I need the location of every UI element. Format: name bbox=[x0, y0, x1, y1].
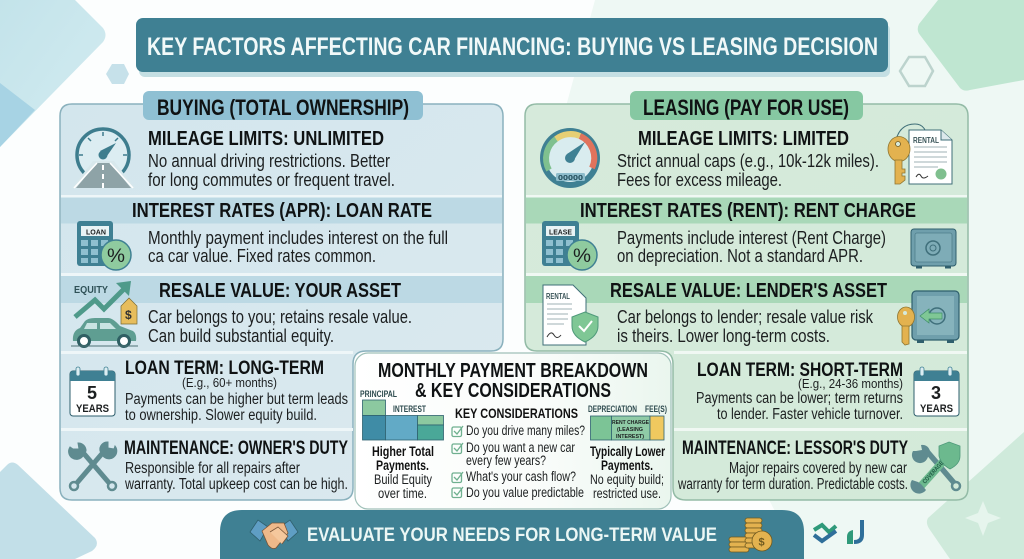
icon: rental document with shield: RENTAL bbox=[546, 292, 570, 301]
icon: calendar 5 years: YEARS bbox=[76, 403, 109, 415]
chart: leasing payment bar: DEPRECIATION bbox=[588, 404, 637, 414]
checklist: key considerations: Do you want a new car bbox=[466, 440, 575, 455]
icon: crossed wrenches bbox=[69, 442, 117, 490]
text: resale value lender's asset: is theirs. Lower long-term costs. bbox=[617, 326, 830, 346]
text: maintenance owner's duty bbox=[124, 438, 348, 493]
icon: loan calculator: % bbox=[107, 246, 125, 267]
heading: monthly payment bbox=[378, 360, 648, 402]
icon: key and rental document bbox=[888, 124, 952, 184]
icon: key and rental document: RENTAL bbox=[913, 136, 939, 145]
text: loan term long-term bbox=[125, 358, 348, 424]
icon: equity car: EQUITY bbox=[74, 285, 108, 296]
text: maintenance owner's duty: MAINTENANCE: OWNER'S DUTY bbox=[124, 438, 348, 459]
chart: leasing payment bar: (LEASING bbox=[617, 427, 643, 433]
text: resale value your asset: RESALE VALUE: YOUR ASSET bbox=[159, 279, 401, 302]
icon: limited mileage gauge: 00000 bbox=[558, 175, 583, 182]
chart: leasing payment bar: RENT CHARGE bbox=[612, 420, 650, 426]
text: maintenance lessor's duty: Major repairs covered by new car bbox=[729, 460, 907, 477]
heading: monthly payment: MONTHLY PAYMENT BREAKDOWN bbox=[378, 360, 648, 382]
icon: handshake bbox=[250, 520, 298, 549]
icon: speedometer and road bbox=[72, 129, 135, 188]
icon: equity car bbox=[71, 281, 138, 346]
chart: buying payment bar bbox=[360, 389, 444, 440]
text: interest rates loan rate: Monthly payment includes interest on the full bbox=[148, 228, 448, 248]
text: maintenance owner's duty: Responsible for all repairs after bbox=[125, 460, 300, 477]
icon: key and safe bbox=[898, 291, 959, 345]
icon: lease calculator: LEASE bbox=[549, 228, 572, 236]
text: mileage limits unlimited: MILEAGE LIMITS: UNLIMITED bbox=[148, 127, 384, 150]
text: higher total payments: Build Equity bbox=[374, 472, 432, 487]
text: mileage limits unlimited: for long commutes or frequent travel. bbox=[148, 170, 395, 190]
text: interest rates loan rate: INTEREST RATES (APR): LOAN RATE bbox=[132, 199, 432, 222]
text: maintenance lessor's duty: warranty for term duration. Predictable costs. bbox=[677, 476, 908, 493]
text: resale value lender's asset bbox=[610, 279, 887, 346]
text: mileage limits limited bbox=[617, 127, 879, 190]
footer text: EVALUATE YOUR NEEDS FOR LONG-TERM VALUE bbox=[307, 524, 717, 546]
text: maintenance owner's duty: warranty. Total upkeep cost can be high. bbox=[124, 476, 348, 493]
text: interest rates rent charge: Payments include interest (Rent Charge) bbox=[617, 228, 886, 248]
chart: buying payment bar: PRINCIPAL bbox=[360, 389, 397, 399]
chart: leasing payment bar: INTEREST) bbox=[616, 434, 644, 440]
text: typically lower payments bbox=[590, 444, 666, 501]
chart: leasing payment bar: FEE(S) bbox=[645, 404, 667, 414]
text: loan term short-term bbox=[696, 360, 903, 423]
icon: coins: $ bbox=[758, 536, 765, 548]
icon: calendar 3 years bbox=[914, 367, 959, 416]
icon: calendar 3 years: 3 bbox=[931, 383, 941, 403]
checklist: key considerations bbox=[452, 405, 585, 500]
text: typically lower payments: Typically Lower bbox=[590, 444, 666, 459]
text: loan term long-term: Payments can be higher but term leads bbox=[125, 391, 348, 408]
checklist: key considerations: KEY CONSIDERATIONS bbox=[455, 405, 578, 421]
icon: wrench and coverage shield bbox=[910, 442, 960, 494]
text: loan term short-term: (E.g., 24-36 months) bbox=[798, 376, 903, 391]
text: loan term long-term: to ownership. Slower equity build. bbox=[125, 407, 317, 424]
text: mileage limits limited: Strict annual caps (e.g., 10k-12k miles). bbox=[617, 151, 879, 171]
icon: calendar 5 years: 5 bbox=[87, 383, 97, 403]
icon: wrench and coverage shield: COVERAGE bbox=[922, 461, 945, 485]
footer banner bbox=[220, 510, 804, 559]
text: resale value your asset bbox=[148, 279, 412, 346]
text: interest rates loan rate: ca car value. Fixed rates common. bbox=[148, 246, 376, 266]
text: mileage limits unlimited bbox=[148, 127, 395, 190]
icon: coins bbox=[729, 518, 772, 552]
chart: leasing payment bar bbox=[588, 404, 667, 440]
text: interest rates rent charge bbox=[580, 199, 916, 266]
checklist: key considerations: What's your cash flow? bbox=[466, 469, 576, 484]
checklist: key considerations: Do you value predictable bbox=[466, 485, 584, 500]
logo bbox=[814, 520, 862, 544]
text: mileage limits limited: MILEAGE LIMITS: LIMITED bbox=[638, 127, 849, 150]
text: resale value your asset: Can build substantial equity. bbox=[148, 326, 334, 346]
panel: monthly payment breakdown bbox=[355, 353, 671, 509]
text: resale value lender's asset: RESALE VALUE: LENDER'S ASSET bbox=[610, 279, 887, 302]
icon: calendar 5 years bbox=[70, 367, 115, 416]
chart: buying payment bar: INTEREST bbox=[393, 404, 426, 414]
text: higher total payments bbox=[372, 444, 434, 501]
heading: leasing: LEASING (PAY FOR USE) bbox=[643, 95, 849, 120]
panel: leasing bbox=[525, 91, 968, 500]
text: maintenance lessor's duty: MAINTENANCE: LESSOR'S DUTY bbox=[682, 438, 908, 459]
text: resale value lender's asset: Car belongs to lender; resale value risk bbox=[617, 307, 874, 327]
text: maintenance lessor's duty bbox=[677, 438, 908, 493]
text: interest rates loan rate bbox=[132, 199, 448, 266]
text: higher total payments: Higher Total bbox=[372, 444, 434, 459]
text: mileage limits limited: Fees for excess mileage. bbox=[617, 170, 782, 190]
checklist: key considerations: Do you drive many miles? bbox=[466, 423, 585, 438]
panel: buying bbox=[60, 91, 503, 500]
icon: safe bbox=[911, 229, 956, 268]
heading: monthly payment: & KEY CONSIDERATIONS bbox=[415, 380, 611, 402]
icon: lease calculator bbox=[542, 221, 597, 270]
icon: calendar 3 years: YEARS bbox=[920, 403, 953, 415]
checklist: key considerations: every few years? bbox=[466, 453, 546, 468]
text: higher total payments: Payments. bbox=[376, 458, 429, 473]
icon: loan calculator bbox=[77, 221, 131, 270]
text: mileage limits unlimited: No annual driving restrictions. Better bbox=[148, 151, 390, 171]
icon: loan calculator: LOAN bbox=[86, 228, 106, 236]
icon: equity car: $ bbox=[125, 308, 132, 322]
text: loan term short-term: LOAN TERM: SHORT-TERM bbox=[697, 360, 903, 381]
text: typically lower payments: No equity build; bbox=[590, 472, 664, 487]
icon: limited mileage gauge bbox=[540, 128, 600, 188]
text: resale value your asset: Car belongs to you; retains resale value. bbox=[148, 307, 412, 327]
text: interest rates rent charge: on depreciation. Not a standard APR. bbox=[617, 246, 863, 266]
text: higher total payments: over time. bbox=[378, 486, 427, 501]
text: typically lower payments: Payments. bbox=[601, 458, 653, 473]
text: interest rates rent charge: INTEREST RATES (RENT): RENT CHARGE bbox=[580, 199, 916, 222]
text: loan term long-term: LOAN TERM: LONG-TERM bbox=[125, 358, 324, 379]
text: loan term long-term: (E.g., 60+ months) bbox=[182, 375, 277, 390]
title banner bbox=[136, 18, 890, 77]
icon: rental document with shield bbox=[543, 285, 598, 345]
icon: lease calculator: % bbox=[573, 246, 591, 267]
text: typically lower payments: restricted use. bbox=[593, 486, 661, 501]
text: loan term short-term: to lender. Faster vehicle turnover. bbox=[717, 406, 903, 423]
heading: buying: BUYING (TOTAL OWNERSHIP) bbox=[157, 95, 409, 120]
text: loan term short-term: Payments can be lower; term returns bbox=[696, 390, 903, 407]
